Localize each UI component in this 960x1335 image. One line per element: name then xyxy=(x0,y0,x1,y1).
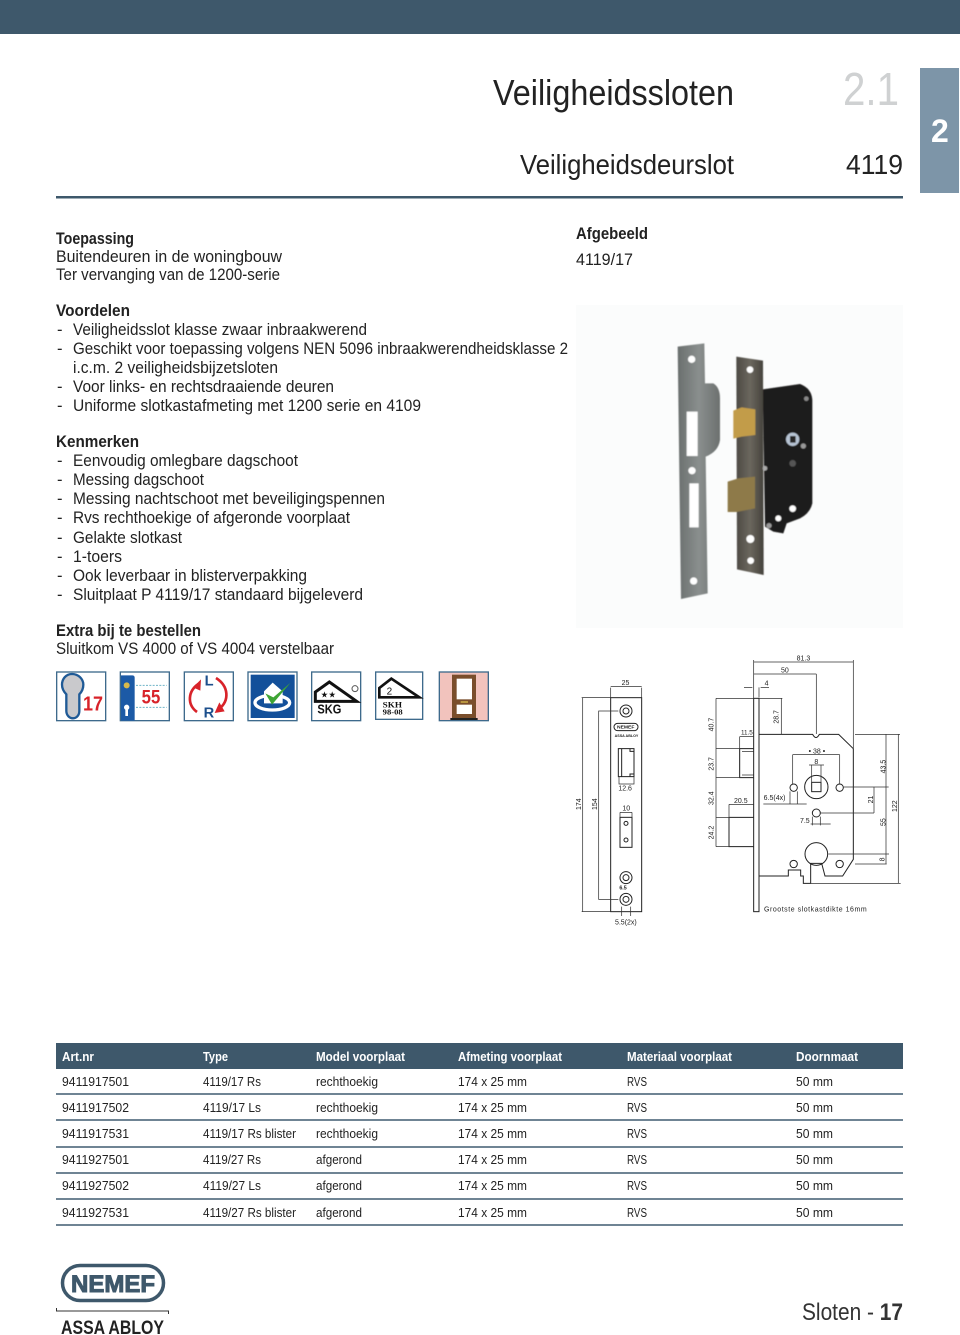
table row: 174 x 25 mm xyxy=(458,1101,527,1115)
table header: Type xyxy=(203,1050,228,1064)
table row: RVS xyxy=(627,1101,647,1115)
table row: 4119/17 Rs blister xyxy=(203,1127,296,1141)
drawing: front plate: 6.5 xyxy=(619,885,627,891)
table row: rechthoekig xyxy=(316,1075,378,1089)
text block: voordelen: - xyxy=(57,378,62,396)
table row: 174 x 25 mm xyxy=(458,1075,527,1089)
table row: 50 mm xyxy=(796,1127,833,1141)
strike plate xyxy=(678,343,720,599)
table row xyxy=(56,1101,903,1121)
table row: 4119/27 Rs blister xyxy=(203,1206,296,1220)
text block: afgebeeld: 4119/17 xyxy=(576,251,633,269)
text block: kenmerken: - xyxy=(57,586,62,604)
table row: 9411927502 xyxy=(62,1179,129,1193)
drawing: side view of lock: 8 xyxy=(879,857,886,861)
drawing: front plate: ASSA ABLOY xyxy=(615,734,639,738)
text block: voordelen xyxy=(56,302,568,415)
text block: voordelen: Uniforme slotkastafmeting met 1200 serie en 4109 xyxy=(73,397,421,415)
drawing: side view of lock: 21 xyxy=(868,795,875,803)
text block: kenmerken: - xyxy=(57,567,62,585)
drawing: side view of lock: 24.2 xyxy=(709,826,716,839)
text block: kenmerken: Messing nachtschoot met beveiligingspennen xyxy=(73,490,385,508)
table row xyxy=(56,1127,903,1148)
table row: 4119/17 Rs xyxy=(203,1075,261,1089)
table row: 4119/27 Ls xyxy=(203,1179,261,1193)
table row xyxy=(56,1075,903,1095)
table row: 50 mm xyxy=(796,1179,833,1193)
drawing: side view of lock xyxy=(709,655,901,913)
drawing: side view of lock: 40.7 xyxy=(709,718,716,731)
icon: cylinder 17 xyxy=(57,672,106,721)
table row: 9411917531 xyxy=(62,1127,129,1141)
drawing: front plate xyxy=(576,680,642,927)
text block: kenmerken: - xyxy=(57,548,62,566)
table row: afgerond xyxy=(316,1206,362,1220)
table row: RVS xyxy=(627,1075,647,1089)
text block: extra bij te bestellen: Sluitkom VS 4000 of VS 4004 verstelbaar xyxy=(56,640,334,658)
dead bolt xyxy=(728,477,755,512)
logo: Nemef Assa Abloy: NEMEF xyxy=(71,1271,155,1298)
icon: left right reversible: L xyxy=(205,673,214,689)
icon: SKH 98-08 xyxy=(376,672,423,719)
drawing: side view of lock: 11.5 xyxy=(741,730,753,737)
text block: toepassing: Buitendeuren in de woningbouw xyxy=(56,248,282,266)
drawing: side view of lock: 20.5 xyxy=(734,798,748,805)
table row: RVS xyxy=(627,1179,647,1193)
table header: Art.nr xyxy=(62,1050,94,1064)
text block: kenmerken: Ook leverbaar in blisterverpakking xyxy=(73,567,307,585)
chapter tab xyxy=(920,68,959,193)
drawing: side view of lock: 81.3 xyxy=(797,655,810,662)
icon: door xyxy=(439,672,488,721)
table row: 4119/27 Rs xyxy=(203,1153,261,1167)
table row: 9411917501 xyxy=(62,1075,129,1089)
title: Veiligheidssloten xyxy=(493,72,734,113)
drawing: side view of lock: 23.7 xyxy=(709,757,716,771)
forend plate xyxy=(736,357,764,575)
drawing: side view of lock: 43.5 xyxy=(881,760,888,773)
text block: voordelen: - xyxy=(57,321,62,339)
text block: kenmerken: Messing dagschoot xyxy=(73,471,204,489)
table row: RVS xyxy=(627,1153,647,1167)
model number: 4119 xyxy=(846,149,903,180)
drawing: side view of lock: 55 xyxy=(881,818,888,826)
text block: voordelen: Veiligheidsslot klasse zwaar inbraakwerend xyxy=(73,321,367,339)
drawing: front plate: 154 xyxy=(592,798,599,810)
table header xyxy=(56,1043,903,1069)
table row: 9411927501 xyxy=(62,1153,129,1167)
text block: toepassing: Ter vervanging van de 1200-serie xyxy=(56,266,280,284)
drawing: side view of lock: 4 xyxy=(765,681,769,688)
logo: Nemef Assa Abloy xyxy=(56,1266,168,1335)
icon: police keurmerk xyxy=(248,672,297,721)
table row xyxy=(56,1206,903,1226)
table row: 9411927531 xyxy=(62,1206,129,1220)
table row: afgerond xyxy=(316,1179,362,1193)
text block: kenmerken: - xyxy=(57,509,62,527)
table row: rechthoekig xyxy=(316,1101,378,1115)
icon: SKH 98-08: SKH xyxy=(383,701,403,710)
icon: SKG two stars: SKG xyxy=(317,702,341,716)
text block: kenmerken: 1-toers xyxy=(73,548,122,566)
table row xyxy=(56,1153,903,1174)
text block: kenmerken: Gelakte slotkast xyxy=(73,529,182,547)
text block: kenmerken: Rvs rechthoekige of afgeronde voorplaat xyxy=(73,509,350,527)
icon: backset 55 xyxy=(120,672,169,721)
text block: extra bij te bestellen xyxy=(56,622,334,658)
drawing: front plate: 5.5(2x) xyxy=(615,920,637,927)
text block: voordelen: i.c.m. 2 veiligheidsbijzetsloten xyxy=(73,359,278,377)
icon row xyxy=(57,672,488,721)
drawing: front plate: 25 xyxy=(622,680,630,687)
text block: voordelen: Voor links- en rechtsdraaiende deuren xyxy=(73,378,334,396)
text block: afgebeeld xyxy=(576,225,648,269)
chapter tab: 2 xyxy=(931,113,949,149)
drawing: side view of lock: 50 xyxy=(781,668,789,675)
lock case xyxy=(763,384,812,533)
technical drawing xyxy=(576,655,901,927)
icon: cylinder 17: 17 xyxy=(83,693,103,716)
header rule xyxy=(56,196,903,198)
table row: 174 x 25 mm xyxy=(458,1206,527,1220)
page number: Sloten - 17 xyxy=(802,1299,903,1326)
latch bolt xyxy=(733,407,755,439)
text block: kenmerken: Eenvoudig omlegbare dagschoot xyxy=(73,452,298,470)
icon: SKG two stars: ★★ xyxy=(321,689,336,699)
drawing: front plate: NEMEF xyxy=(617,725,634,731)
drawing: side view of lock: 8 xyxy=(814,759,818,766)
text block: kenmerken: - xyxy=(57,452,62,470)
table header: Model voorplaat xyxy=(316,1050,406,1064)
icon: SKH 98-08: 2 xyxy=(387,687,393,698)
table row: 174 x 25 mm xyxy=(458,1153,527,1167)
text block: voordelen: Voordelen xyxy=(56,302,130,320)
section number: 2.1 xyxy=(843,63,899,115)
table row: RVS xyxy=(627,1206,647,1220)
drawing: side view of lock: Grootste slotkastdikte 16mm xyxy=(764,906,867,913)
text block: extra bij te bestellen: Extra bij te bestellen xyxy=(56,622,201,640)
subtitle: Veiligheidsdeurslot xyxy=(520,149,734,180)
drawing: side view of lock: 122 xyxy=(892,800,899,812)
text block: toepassing: Toepassing xyxy=(56,230,134,248)
text block: voordelen: Geschikt voor toepassing volgens NEN 5096 inbraakwerendheidsklasse 2 xyxy=(73,340,568,358)
drawing: side view of lock: 7.5 xyxy=(800,818,810,825)
text block: kenmerken: - xyxy=(57,471,62,489)
text block: voordelen: - xyxy=(57,340,62,358)
text block: kenmerken: Kenmerken xyxy=(56,433,139,451)
table row: 9411917502 xyxy=(62,1101,129,1115)
table row xyxy=(56,1179,903,1200)
icon: SKG two stars xyxy=(312,672,361,721)
table row: 174 x 25 mm xyxy=(458,1127,527,1141)
icon: left right reversible: R xyxy=(204,705,215,721)
table row: 174 x 25 mm xyxy=(458,1179,527,1193)
icon: backset 55: 55 xyxy=(142,687,161,708)
text block: kenmerken: - xyxy=(57,490,62,508)
text block: voordelen: - xyxy=(57,397,62,415)
drawing: front plate: 12.6 xyxy=(618,786,632,793)
table row: afgerond xyxy=(316,1153,362,1167)
drawing: side view of lock: 28.7 xyxy=(774,710,781,724)
text block: kenmerken xyxy=(56,433,385,604)
product table xyxy=(56,1043,903,1226)
table row: RVS xyxy=(627,1127,647,1141)
drawing: side view of lock: 32.4 xyxy=(709,791,716,805)
drawing: side view of lock: • 38 • xyxy=(809,749,826,756)
table header: Materiaal voorplaat xyxy=(627,1050,733,1064)
icon: left right reversible xyxy=(184,672,233,721)
icon: SKH 98-08: 98-08 xyxy=(383,707,403,716)
table row: 50 mm xyxy=(796,1153,833,1167)
drawing: front plate: 10 xyxy=(622,806,630,813)
top bar xyxy=(0,0,960,34)
table header: Doornmaat xyxy=(796,1050,859,1064)
text block: kenmerken: - xyxy=(57,529,62,547)
table row: 4119/17 Ls xyxy=(203,1101,261,1115)
text block: afgebeeld: Afgebeeld xyxy=(576,225,648,243)
spindle xyxy=(786,433,799,446)
table row: 50 mm xyxy=(796,1075,833,1089)
table row: rechthoekig xyxy=(316,1127,378,1141)
drawing: front plate: 174 xyxy=(576,798,583,810)
table row: 50 mm xyxy=(796,1101,833,1115)
table row: 50 mm xyxy=(796,1206,833,1220)
text block: toepassing xyxy=(56,230,282,284)
table header: Afmeting voorplaat xyxy=(458,1050,563,1064)
drawing: side view of lock: 6.5(4x) xyxy=(764,795,785,802)
product photo: lock and strike plate xyxy=(576,305,903,628)
text block: kenmerken: Sluitplaat P 4119/17 standaard bijgeleverd xyxy=(73,586,363,604)
